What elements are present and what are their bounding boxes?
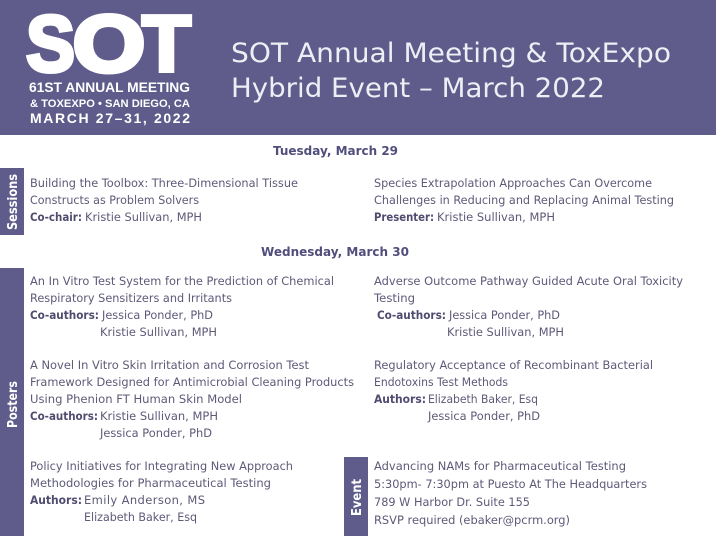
poster: Policy Initiatives (30, 459, 293, 524)
session: Building the Toolbox: Constructs as Problem Solvers (30, 193, 199, 207)
session: Species Extrapolation: Presenter: (374, 210, 434, 224)
side label: Posters (0, 268, 24, 536)
poster: Novel In Vitro Skin Irritation: A Novel In Vitro Skin Irritation and Corrosion Test (30, 358, 309, 372)
SOT logo: 61ST ANNUAL MEETING (29, 79, 190, 95)
heading: Wednesday: Wednesday, March 30 (261, 244, 409, 259)
poster: Novel In Vitro Skin Irritation: Framework Designed for Antimicrobial Cleaning Products (30, 375, 354, 389)
header title: Hybrid Event – March 2022 (231, 73, 605, 104)
event details: RSVP required (ebaker@pcrm.org) (374, 513, 570, 527)
session: Species Extrapolation: Challenges in Reducing and Replacing Animal Testing (374, 193, 674, 207)
poster: Policy Initiatives: Methodologies for Pharmaceutical Testing (30, 476, 271, 490)
poster: Adverse Outcome Pathway: Testing (373, 291, 415, 305)
poster: Novel In Vitro Skin Irritation: Using Phenion FT Human Skin Model (30, 392, 242, 406)
poster: In Vitro Test System: Kristie Sullivan, MPH (100, 325, 217, 339)
poster: Regulatory Acceptance: Elizabeth Baker, Esq (428, 392, 538, 406)
poster: Adverse Outcome Pathway: Kristie Sullivan, MPH (447, 325, 564, 339)
session: Building the Toolbox: Building the Toolbox: Three-Dimensional Tissue (30, 176, 298, 190)
poster: In Vitro Test System: Co-authors: (30, 308, 99, 322)
poster: In Vitro Test System: An In Vitro Test System for the Prediction of Chemical (30, 274, 334, 288)
poster: Policy Initiatives: Authors: (30, 493, 82, 507)
poster: Regulatory Acceptance: Regulatory Acceptance of Recombinant Bacterial (374, 358, 653, 372)
SOT logo: T (142, 0, 191, 88)
poster: Policy Initiatives: Policy Initiatives for Integrating New Approach (30, 459, 293, 473)
header banner (0, 0, 716, 135)
poster: In Vitro Test System: Jessica Ponder, PhD (101, 308, 213, 322)
poster: Regulatory Acceptance: Jessica Ponder, PhD (427, 409, 540, 423)
poster: Novel In Vitro Skin Irritation: Jessica Ponder, PhD (99, 426, 212, 440)
side label: Sessions: Sessions (6, 174, 21, 230)
poster: Adverse Outcome Pathway: Co-authors: (377, 308, 446, 322)
side label: Posters: Posters (6, 381, 21, 428)
event details: 789 W Harbor Dr. Suite 155 (374, 495, 530, 509)
header title: SOT Annual Meeting & ToxExpo (231, 38, 671, 69)
header title (231, 38, 671, 104)
poster: Novel In Vitro Skin Irritation: Co-authors: (30, 409, 98, 423)
poster: Adverse Outcome Pathway (373, 274, 683, 339)
SOT logo: & TOXEXPO • SAN DIEGO, CA (30, 98, 190, 110)
poster: Adverse Outcome Pathway: Adverse Outcome Pathway Guided Acute Oral Toxicity (374, 274, 683, 288)
poster: Policy Initiatives: Elizabeth Baker, Esq (84, 510, 197, 524)
session: Species Extrapolation (374, 176, 674, 224)
poster: Adverse Outcome Pathway: Jessica Ponder, PhD (448, 308, 560, 322)
poster: Regulatory Acceptance: Authors: (374, 392, 426, 406)
event details: Advancing NAMs for Pharmaceutical Testing (374, 459, 626, 473)
side label: Event (344, 457, 368, 536)
poster: Novel In Vitro Skin Irritation (30, 358, 354, 440)
event details (374, 459, 647, 527)
side label: Sessions (0, 168, 24, 235)
event details: 5:30pm- 7:30pm at Puesto At The Headquarters (374, 477, 647, 491)
session: Building the Toolbox (30, 176, 298, 224)
SOT logo: S (26, 0, 75, 88)
heading: Tuesday: Tuesday, March 29 (273, 143, 398, 158)
SOT logo (26, 0, 191, 126)
SOT logo: O (73, 0, 145, 88)
poster: Policy Initiatives: Emily Anderson, MS (84, 493, 205, 507)
poster: Regulatory Acceptance (374, 358, 653, 423)
poster: In Vitro Test System (30, 274, 334, 339)
poster: In Vitro Test System: Respiratory Sensitizers and Irritants (30, 291, 232, 305)
poster: Novel In Vitro Skin Irritation: Kristie Sullivan, MPH (100, 409, 218, 423)
session: Species Extrapolation: Species Extrapolation Approaches Can Overcome (374, 176, 652, 190)
side label: Event: Event (350, 479, 365, 516)
session: Building the Toolbox: Co-chair: (30, 210, 82, 224)
SOT logo: MARCH 27–31, 2022 (30, 110, 190, 126)
poster: Regulatory Acceptance: Endotoxins Test Methods (374, 375, 508, 389)
session: Species Extrapolation: Kristie Sullivan, MPH (437, 210, 555, 224)
session: Building the Toolbox: Kristie Sullivan, MPH (85, 210, 202, 224)
